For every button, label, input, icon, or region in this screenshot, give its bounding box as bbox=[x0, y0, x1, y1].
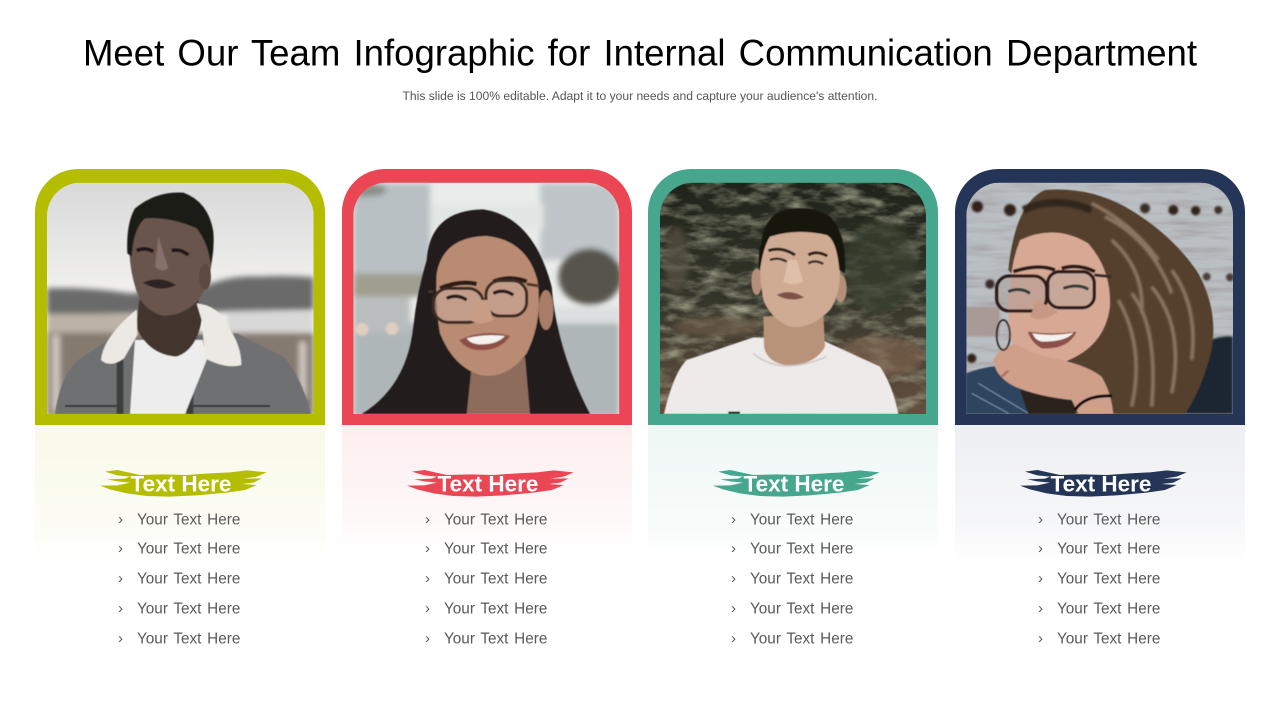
bullet list: Your Text Here bbox=[750, 630, 853, 648]
bullet list: Your Text Here bbox=[1057, 512, 1160, 528]
bullet list: Your Text Here bbox=[750, 600, 853, 618]
bullet list: › bbox=[1038, 511, 1043, 528]
bullet list: › bbox=[1038, 630, 1043, 647]
bullet list: Your Text Here bbox=[444, 570, 547, 588]
bullet list bbox=[731, 511, 853, 648]
bullet list: Your Text Here bbox=[444, 600, 547, 618]
bullet list: › bbox=[731, 600, 736, 617]
bullet list: › bbox=[118, 540, 123, 557]
panel: team member 1 bbox=[35, 169, 325, 648]
frame bbox=[342, 169, 632, 425]
brush heading bbox=[713, 470, 880, 497]
brush heading: Text Here bbox=[744, 472, 844, 496]
bullet list: Your Text Here bbox=[137, 540, 240, 558]
bullet list: › bbox=[118, 511, 123, 528]
bullet list bbox=[425, 511, 547, 648]
bullet list: Your Text Here bbox=[1057, 630, 1160, 648]
bullet list: Your Text Here bbox=[1057, 600, 1160, 618]
panel: team member 4 bbox=[955, 169, 1245, 648]
bullet list: › bbox=[425, 630, 430, 647]
bullet list: Your Text Here bbox=[444, 540, 547, 558]
fade panel bbox=[648, 425, 938, 560]
brush heading: Text Here bbox=[438, 472, 538, 496]
bullet list: › bbox=[731, 511, 736, 528]
bullet list: Your Text Here bbox=[137, 600, 240, 618]
bullet list bbox=[1038, 511, 1160, 648]
bullet list: Your Text Here bbox=[137, 512, 240, 528]
bullet list: › bbox=[118, 570, 123, 587]
bullet list: › bbox=[425, 600, 430, 617]
bullet list: › bbox=[1038, 540, 1043, 557]
bullet list: Your Text Here bbox=[137, 570, 240, 588]
portrait: man in denim jacket bbox=[47, 183, 314, 416]
brush heading bbox=[1020, 470, 1187, 497]
bullet list: Your Text Here bbox=[1057, 570, 1160, 588]
frame bbox=[648, 169, 938, 425]
bullet list: Your Text Here bbox=[137, 630, 240, 648]
bullet list: › bbox=[731, 540, 736, 557]
frame bbox=[955, 169, 1245, 425]
brush heading: Text Here bbox=[1051, 472, 1151, 496]
brush heading bbox=[100, 470, 267, 497]
bullet list: › bbox=[425, 511, 430, 528]
bullet list: › bbox=[1038, 600, 1043, 617]
portrait: woman with glasses, street background bbox=[347, 183, 622, 417]
frame bbox=[35, 169, 325, 425]
bullet list: › bbox=[731, 630, 736, 647]
bullet list: Your Text Here bbox=[750, 512, 853, 528]
portrait: man in white t-shirt, forest background bbox=[660, 183, 926, 416]
fade panel bbox=[35, 425, 325, 565]
bullet list: Your Text Here bbox=[750, 570, 853, 588]
title: Meet Our Team Infographic for Internal Communication Department bbox=[83, 32, 1197, 74]
fade panel bbox=[955, 425, 1245, 565]
brush heading: Text Here bbox=[131, 472, 231, 496]
bullet list: Your Text Here bbox=[444, 630, 547, 648]
bullet list: Your Text Here bbox=[1057, 540, 1160, 558]
bullet list: Your Text Here bbox=[444, 512, 547, 528]
bullet list: › bbox=[118, 600, 123, 617]
panel: team member 3 bbox=[648, 169, 938, 648]
bullet list: › bbox=[1038, 570, 1043, 587]
bullet list bbox=[118, 511, 240, 648]
bullet list: › bbox=[731, 570, 736, 587]
bullet list: › bbox=[425, 570, 430, 587]
fade panel bbox=[342, 425, 632, 555]
brush heading bbox=[407, 470, 574, 497]
portrait: smiling woman with glasses, brick wall background bbox=[966, 183, 1234, 416]
bullet list: › bbox=[118, 630, 123, 647]
bullet list: › bbox=[425, 540, 430, 557]
panel: team member 2 bbox=[342, 169, 632, 648]
bullet list: Your Text Here bbox=[750, 540, 853, 558]
subtitle: This slide is 100% editable. Adapt it to your needs and capture your audience's attention. bbox=[403, 89, 877, 103]
